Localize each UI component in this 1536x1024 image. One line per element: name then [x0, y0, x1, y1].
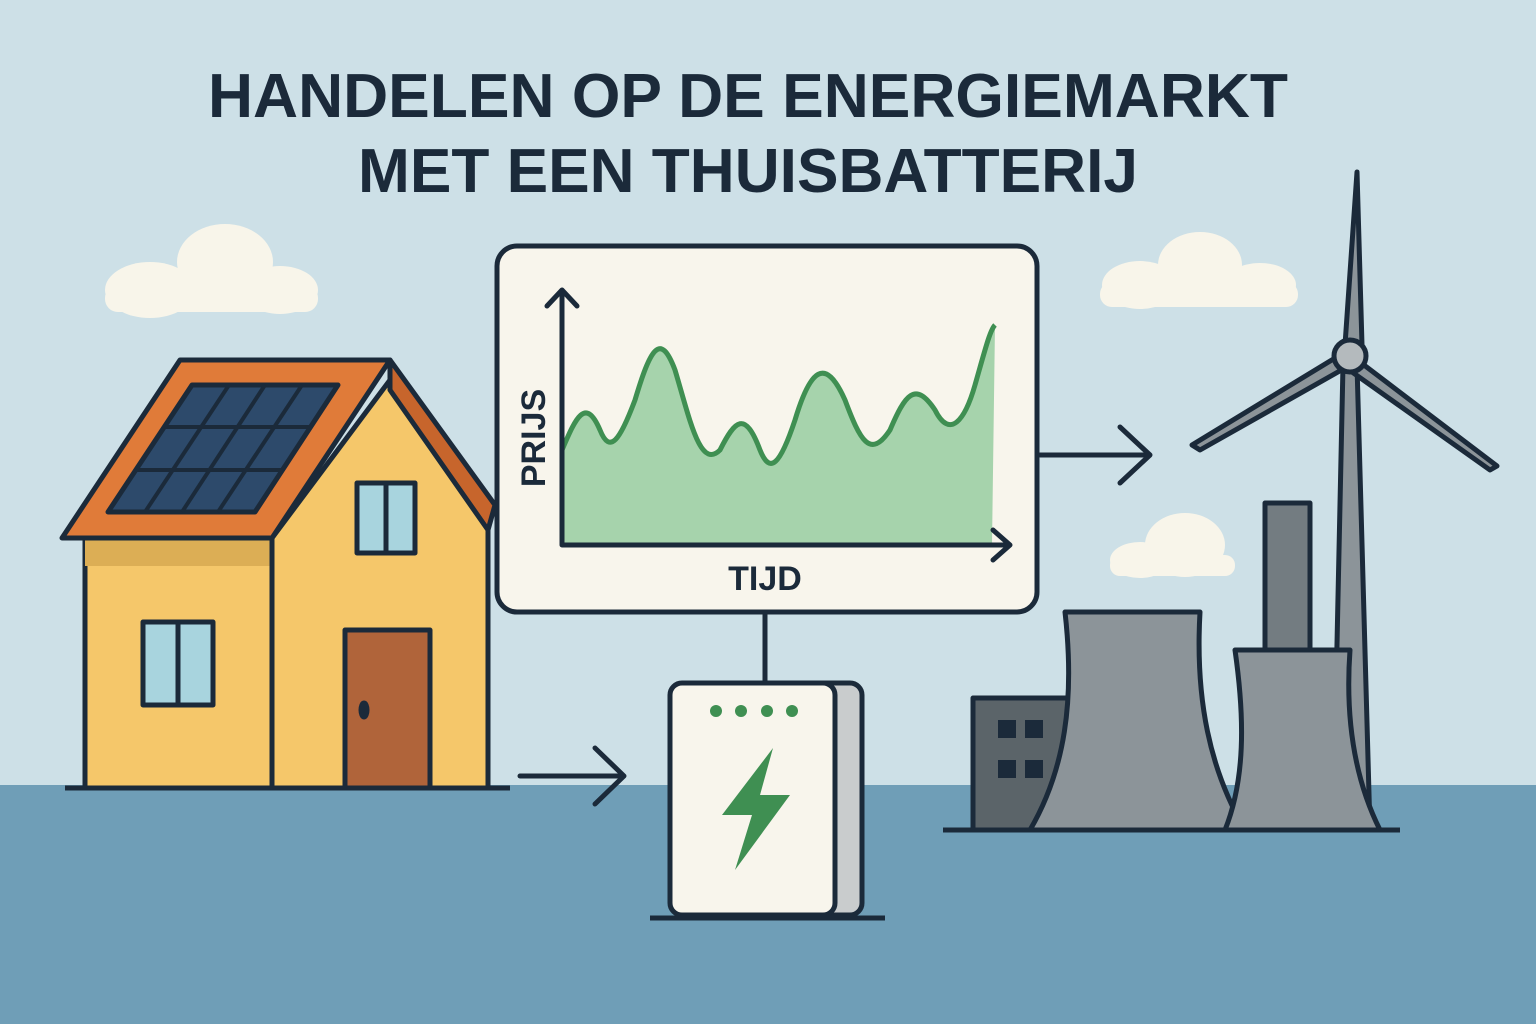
wind turbine: [1192, 172, 1497, 830]
icon: lightning: [722, 748, 790, 870]
battery: [650, 683, 885, 918]
title: HANDELEN OP DE ENERGIEMARKT: [208, 62, 1288, 131]
panel: price chart: TIJD: [728, 560, 802, 598]
house: [62, 360, 510, 788]
arrow: chart to market: [1040, 427, 1150, 483]
panel: price chart: [497, 246, 1037, 612]
title: [208, 62, 1288, 206]
power plant: [943, 503, 1400, 830]
cloud left: [105, 224, 318, 318]
arrow: house to battery: [520, 748, 624, 804]
icon: solar panel: [108, 385, 338, 512]
cloud right: [1100, 232, 1298, 309]
panel: price chart: PRIJS: [515, 389, 553, 487]
title: MET EEN THUISBATTERIJ: [358, 137, 1138, 206]
cloud small: [1110, 513, 1235, 578]
